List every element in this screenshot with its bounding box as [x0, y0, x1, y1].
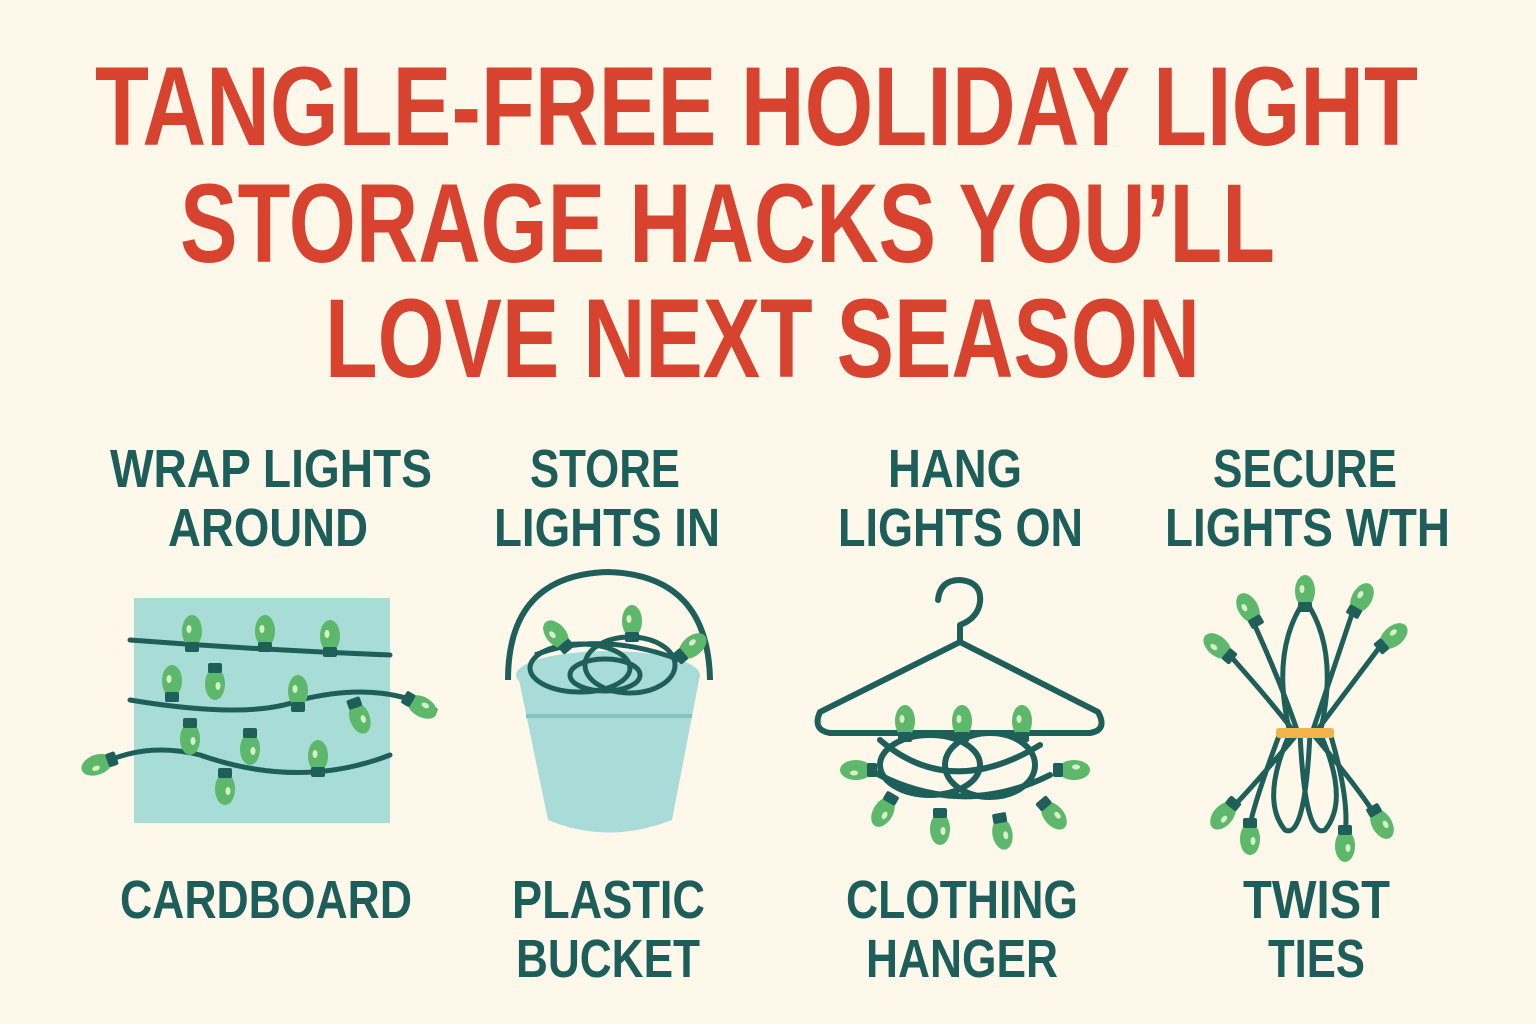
heading: secure lights with: [1165, 439, 1450, 558]
heading: hang lights on: [838, 439, 1083, 558]
heading: secure lights with: LIGHTS WTH: [1165, 498, 1450, 558]
panel: cardboard: [78, 439, 441, 930]
heading: secure lights with: SECURE: [1213, 439, 1397, 499]
heading: store lights in: [494, 439, 720, 558]
label: twist ties: TIES: [1268, 929, 1365, 989]
label: twist ties: TWIST: [1243, 870, 1390, 930]
panel: clothing hanger: [818, 439, 1102, 989]
icon: twist-tied bundle: [1199, 575, 1412, 862]
heading: hang lights on: LIGHTS ON: [838, 498, 1083, 558]
heading: wrap lights around: [110, 439, 432, 558]
title: LOVE NEXT SEASON: [325, 276, 1200, 401]
label: twist ties: [1243, 870, 1390, 989]
heading: hang lights on: HANG: [888, 439, 1022, 499]
heading: wrap lights around: AROUND: [168, 498, 368, 558]
label: clothing hanger: CLOTHING: [846, 870, 1078, 930]
label: clothing hanger: HANGER: [866, 929, 1058, 989]
icon: cardboard with lights: [78, 598, 441, 823]
icon: bucket: [508, 572, 711, 832]
label: plastic bucket: BUCKET: [516, 929, 700, 989]
panel: twist ties: [1165, 439, 1450, 989]
label: plastic bucket: [512, 870, 705, 989]
panel: plastic bucket: [494, 439, 720, 989]
icon: hanger: [818, 580, 1102, 851]
title: [95, 44, 1418, 401]
label: cardboard: CARDBOARD: [120, 870, 412, 930]
label: plastic bucket: PLASTIC: [512, 870, 705, 930]
label: clothing hanger: [846, 870, 1078, 989]
heading: store lights in: STORE: [530, 439, 680, 499]
heading: wrap lights around: WRAP LIGHTS: [110, 439, 432, 499]
heading: store lights in: LIGHTS IN: [494, 498, 720, 558]
